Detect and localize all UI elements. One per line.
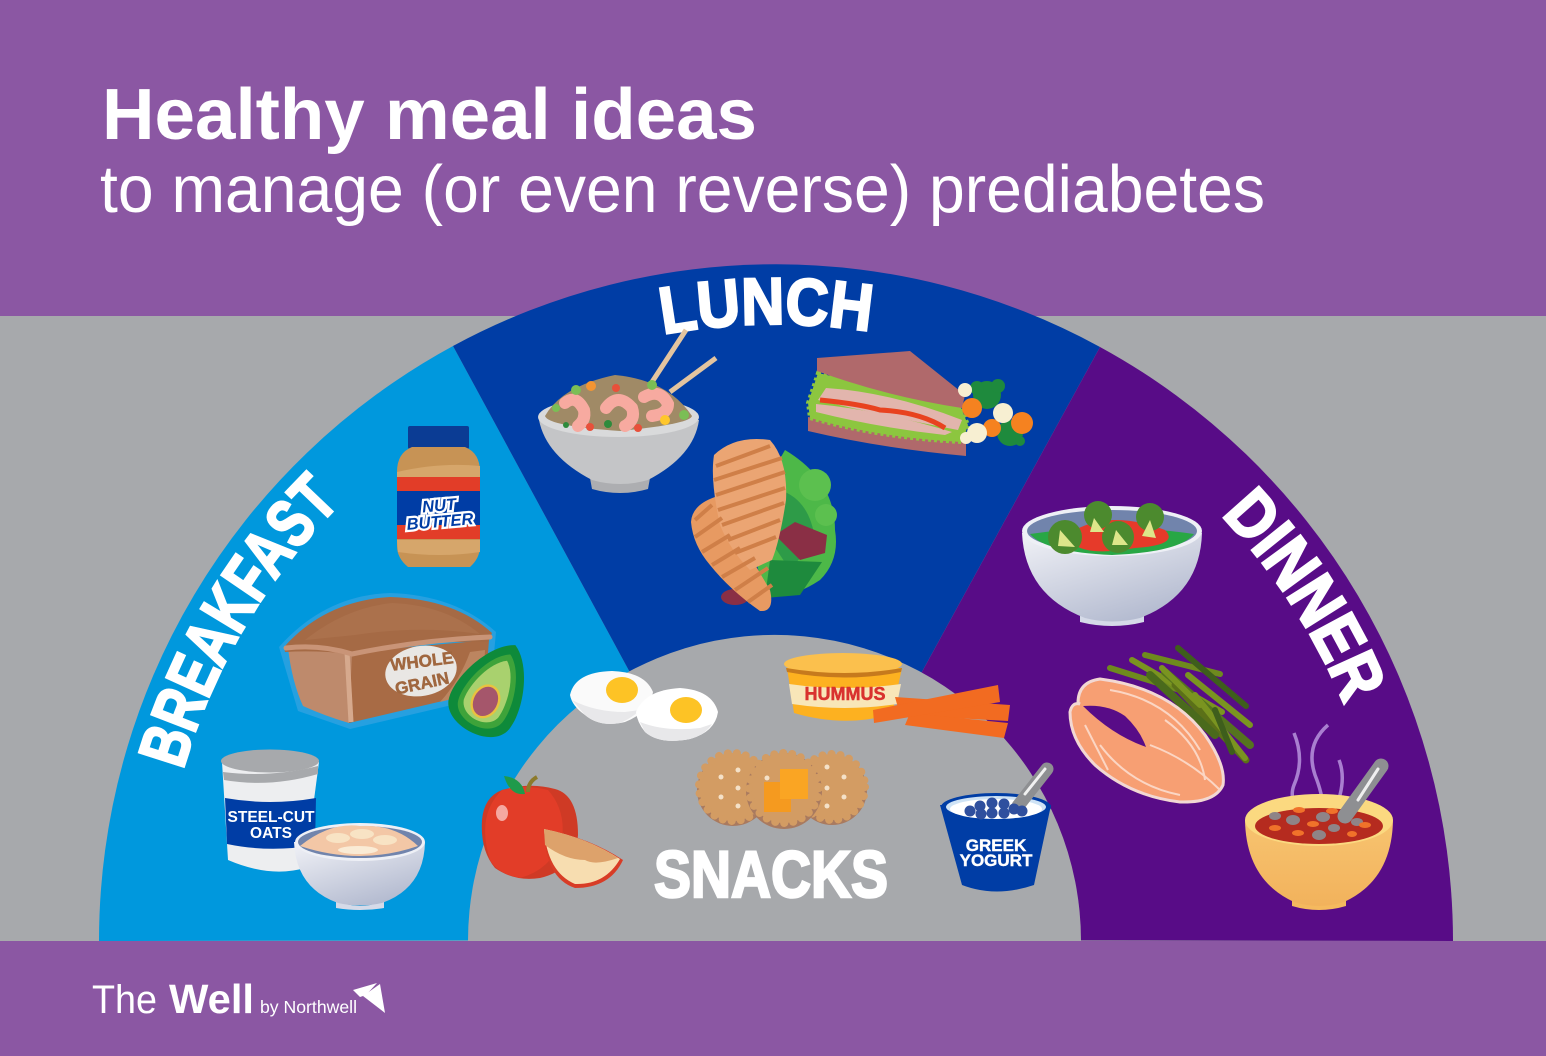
icon: steel-cut oats tub: STEEL-CUT (228, 809, 315, 826)
panel: dinner wedge (775, 347, 1453, 941)
icon: steel-cut oats tub (221, 750, 319, 872)
icon: green beans (1110, 648, 1250, 760)
icon: club sandwich (808, 351, 968, 456)
icon: crackers with cheese (697, 753, 867, 829)
footer band (0, 941, 1546, 1056)
logo: The Well by Northwell: by Northwell (260, 997, 357, 1017)
heading: snacks: SNACKS (654, 837, 888, 911)
icon: soup bowl with spoon and steam (1245, 725, 1393, 910)
logo: The Well by Northwell (92, 976, 385, 1022)
icon: greek yogurt cup (940, 769, 1051, 892)
icon: whole grain bread: GRAIN (393, 669, 451, 698)
panel: breakfast wedge (99, 346, 775, 941)
icon: nut butter jar: NUT (421, 495, 459, 516)
icon: oatmeal bowl (294, 823, 425, 910)
icon: greek yogurt cup: GREEK (966, 836, 1027, 855)
heading: breakfast: BREAKFAST (138, 469, 334, 768)
icon: hummus tub: HUMMUS (804, 684, 886, 704)
subtitle: to manage (or even reverse) prediabetes (100, 152, 1265, 227)
icon: salad bowl (1022, 501, 1202, 626)
icon: salmon steak (1070, 679, 1223, 802)
icon: fried rice bowl with chopsticks (538, 330, 716, 493)
header band (0, 0, 1546, 316)
icon: avocado (439, 629, 546, 748)
logo: The Well by Northwell: Well (169, 976, 254, 1022)
icon: nut butter jar (397, 426, 480, 567)
icon: boiled eggs (570, 671, 718, 741)
icon: apple with slice (482, 776, 623, 888)
heading: lunch: LUNCH (658, 277, 873, 335)
panel: snacks semicircle (468, 635, 1081, 941)
icon: greek yogurt cup: YOGURT (960, 851, 1033, 870)
icon: hummus tub (784, 653, 902, 721)
icon: nut butter jar: BUTTER (406, 510, 474, 534)
icon: whole grain bread: WHOLE (389, 648, 455, 675)
heading: dinner: DINNER (1222, 485, 1383, 706)
icon: whole grain bread (279, 593, 496, 729)
title: Healthy meal ideas (102, 75, 757, 155)
panel: lunch wedge (453, 264, 1100, 940)
icon: side vegetables (958, 379, 1033, 446)
icon: steel-cut oats tub: OATS (250, 825, 292, 842)
logo: The Well by Northwell: The (92, 978, 157, 1022)
icon: grilled chicken and greens (691, 439, 837, 611)
gray background band (0, 316, 1546, 941)
icon: carrot sticks (873, 685, 1010, 738)
